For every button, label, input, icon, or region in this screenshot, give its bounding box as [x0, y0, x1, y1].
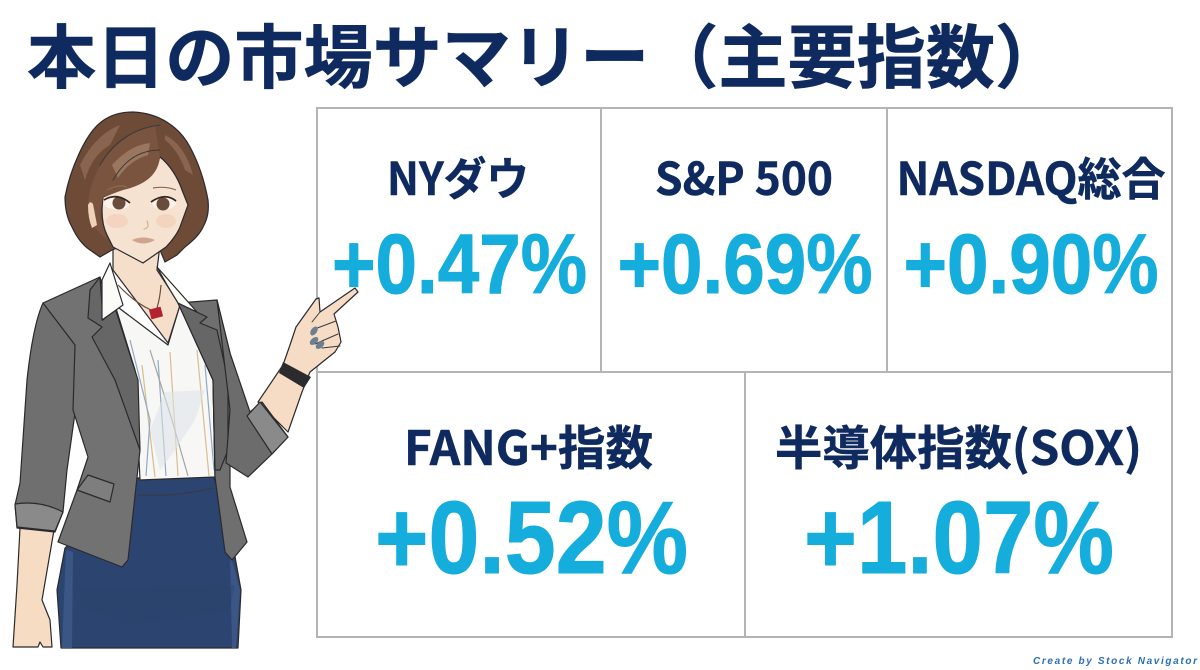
icon: left lapel	[88, 277, 140, 450]
icon: eyes	[104, 186, 176, 210]
icon: cheeks	[106, 214, 176, 228]
panel: NASDAQ composite: NASDAQ総合	[896, 143, 1166, 208]
icon: fingernails	[308, 325, 326, 351]
panel: NY Dow	[332, 143, 587, 311]
icon: nose	[144, 221, 148, 229]
panel: semiconductor index SOX: +1.07%	[804, 480, 1114, 595]
icon: blazer sleeve right	[217, 300, 288, 477]
icon: hair back	[65, 112, 208, 262]
icon: skirt	[57, 474, 241, 648]
icon: blazer pocket	[77, 475, 114, 502]
panel: FANG+ index	[375, 410, 688, 595]
icon: neck and chest	[113, 245, 180, 343]
panel: NASDAQ composite	[896, 143, 1166, 311]
icon: blazer cuff left	[15, 503, 63, 531]
icon: hair fringe	[80, 125, 193, 240]
icon: watch	[279, 362, 311, 388]
icon: blazer right body	[178, 300, 247, 560]
panel: NY Dow: +0.47%	[332, 217, 587, 311]
panel: S&P 500: S&P 500	[655, 143, 833, 208]
panel: FANG+ index: +0.52%	[375, 480, 688, 595]
icon: blazer sleeve left	[15, 303, 80, 532]
illustration: businesswoman pointing	[13, 112, 358, 648]
icon: face	[102, 157, 188, 263]
icon: hand finger lines	[312, 312, 340, 348]
panel: NY Dow: NYダウ	[387, 143, 529, 208]
icon: necklace	[118, 285, 163, 319]
panel: NASDAQ composite: +0.90%	[904, 217, 1158, 311]
icon: blazer left body	[43, 277, 140, 567]
panel: FANG+ index: FANG+指数	[404, 410, 653, 479]
panel: S&P 500: +0.69%	[618, 217, 872, 311]
panel: semiconductor index SOX: 半導体指数(SOX)	[775, 410, 1142, 479]
icon: right forearm and hand	[258, 288, 358, 432]
icon: blazer cuff right	[247, 402, 288, 454]
icon: shirt	[115, 305, 215, 480]
icon: left ear	[88, 202, 97, 228]
icon: mouth	[132, 238, 155, 244]
icon: collar	[102, 263, 197, 320]
panel: index grid	[317, 108, 1172, 637]
credit: Create by Stock Navigator	[1033, 656, 1198, 667]
icon: right lapel	[178, 303, 228, 470]
icon: left forearm and hand	[13, 528, 54, 647]
title: 本日の市場サマリー（主要指数）	[27, 2, 1064, 102]
panel: semiconductor index SOX	[775, 410, 1142, 595]
panel: S&P 500	[618, 143, 872, 311]
